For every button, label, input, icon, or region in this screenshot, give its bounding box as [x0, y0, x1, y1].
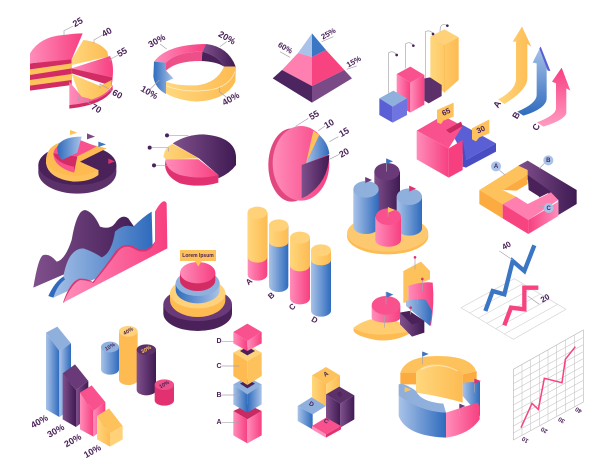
ring chart with flags — [399, 351, 481, 438]
four stacked cylinders A to D: A — [244, 276, 254, 287]
isometric percentage bars: 40% — [29, 413, 50, 430]
percentage cylinders: 40% — [122, 326, 135, 337]
lettered isometric blocks — [298, 367, 354, 438]
zigzag lines on floor grid: 20 — [539, 292, 552, 304]
layered pie chart with values: 70 — [89, 102, 103, 115]
cylinders on yellow platter — [347, 158, 428, 254]
stacked cylinder pyramid with callout: Lorem Ipsum — [182, 253, 214, 259]
percentage cylinders: 10% — [104, 342, 117, 353]
step block chart with value tags: 65 — [440, 106, 453, 118]
vertical pie chart: 20 — [337, 146, 351, 160]
stacked cube column A to D: A — [216, 419, 222, 426]
pyramid chart — [273, 26, 363, 103]
layered pie chart with values: 60 — [110, 87, 124, 101]
radial stepped chart with pins — [354, 256, 433, 340]
lettered isometric blocks: A — [322, 370, 330, 379]
isometric percentage bars: 30% — [45, 422, 66, 440]
percentage cylinders: 10% — [158, 380, 171, 390]
layered pie chart with values: 40 — [100, 25, 114, 39]
stacked cube column A to D: B — [216, 392, 222, 399]
growth arrows A B C: B — [510, 110, 522, 121]
layered pie chart with values: 55 — [115, 45, 129, 59]
layered pie chart with values — [30, 15, 129, 115]
donut chart with percentages: 30% — [146, 32, 167, 50]
layered wave area chart — [33, 201, 167, 303]
square ring chart with letter badges: C — [546, 206, 551, 212]
line chart on wall grid — [513, 330, 583, 443]
growth arrows A B C: C — [530, 121, 542, 132]
step block chart with value tags — [417, 103, 496, 178]
donut chart with percentages — [139, 29, 241, 108]
isometric percentage bars — [29, 327, 123, 460]
donut chart with percentages: 10% — [139, 84, 160, 101]
four stacked cylinders A to D: C — [287, 302, 298, 312]
stacked pie chart with flags — [38, 130, 116, 194]
percentage cylinders: 30% — [140, 345, 153, 355]
line chart on wall grid: 20 — [540, 425, 549, 434]
stacked cube column A to D: C — [216, 363, 222, 370]
line chart on wall grid: 30 — [557, 415, 566, 424]
percentage cylinders — [101, 326, 174, 406]
stacked cylinder pyramid with callout — [163, 250, 232, 331]
isometric percentage bars: 10% — [82, 442, 103, 460]
stacked cube column A to D: D — [216, 338, 222, 345]
zigzag lines on floor grid: 40 — [500, 239, 513, 252]
top right isometric bars with pins — [379, 24, 459, 123]
stacked cube column A to D — [216, 324, 262, 443]
four stacked cylinders A to D: D — [310, 315, 319, 325]
lettered isometric blocks: C — [322, 417, 330, 426]
lettered isometric blocks: D — [308, 400, 315, 409]
isometric percentage bars: 20% — [62, 432, 83, 449]
pyramid chart: 15% — [345, 54, 363, 69]
vertical pie chart: 55 — [307, 108, 321, 122]
growth arrows A B C — [491, 27, 570, 132]
growth arrows A B C: A — [491, 99, 503, 110]
step block chart with value tags: 30 — [475, 124, 487, 135]
pyramid chart: 60% — [276, 40, 294, 56]
vertical pie chart: 10 — [322, 117, 336, 131]
pyramid chart: 25% — [320, 26, 337, 41]
line chart on wall grid: 40 — [574, 405, 583, 414]
four stacked cylinders A to D: B — [266, 290, 277, 301]
zigzag lines on floor grid — [461, 239, 566, 339]
line chart on wall grid: 10 — [521, 435, 530, 443]
donut chart with percentages: 20% — [217, 29, 237, 47]
square ring chart with letter badges: B — [546, 158, 551, 164]
vertical pie chart — [268, 108, 351, 202]
square ring chart with letter badges — [479, 155, 577, 234]
four stacked cylinders A to D — [244, 207, 331, 325]
vertical pie chart: 15 — [337, 125, 351, 139]
layered pie chart with values: 25 — [71, 15, 85, 29]
donut chart with percentages: 40% — [220, 90, 241, 108]
lettered isometric blocks: B — [336, 390, 344, 399]
pie chart with dotted leaders — [148, 133, 236, 186]
square ring chart with letter badges: A — [494, 164, 499, 170]
